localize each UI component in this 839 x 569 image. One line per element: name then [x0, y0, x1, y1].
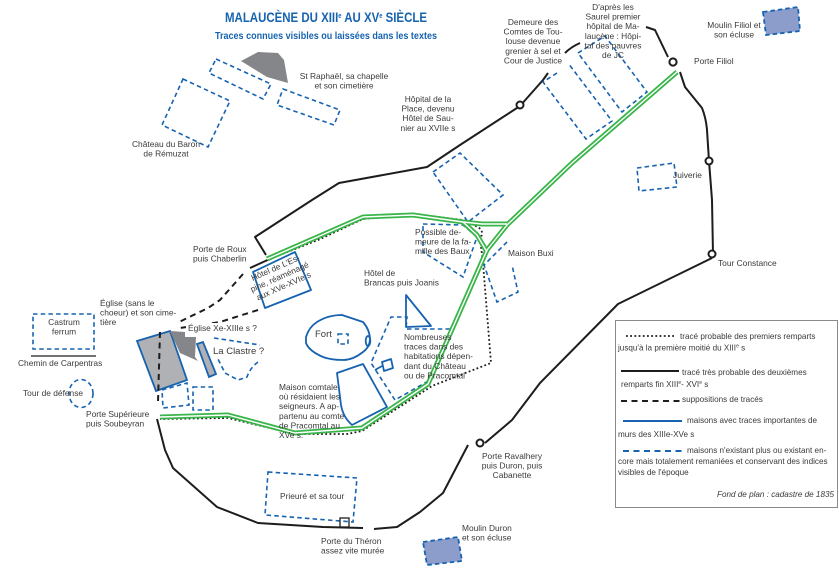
Castrum ferrum house: [33, 314, 94, 349]
labels on the map: ou de Pracomtal: [404, 370, 465, 380]
legend panel: [616, 320, 838, 508]
Juiverie house: [637, 163, 677, 191]
labels on the map: Place, devenu: [401, 104, 455, 114]
labels on the map: son écluse: [714, 30, 754, 40]
small square link: [375, 366, 382, 370]
labels on the map: où résidaient les: [279, 392, 340, 402]
legend: solid black text: s: [702, 380, 708, 389]
Moulin Filiol: [763, 7, 800, 35]
labels on the map: Porte du Théron: [321, 536, 381, 546]
La Clastre dashed: [214, 338, 260, 380]
legend: solid black text: remparts fin XIII: [621, 380, 678, 389]
title: e: [338, 13, 342, 20]
houses near church: [162, 383, 213, 410]
labels on the map: traces dans des: [404, 342, 463, 352]
St Raphaël houses: [209, 59, 340, 125]
label: St Raphaël: et son cimetière: [314, 81, 374, 91]
labels on the map: Hôpital de la: [405, 94, 451, 104]
label: Château du Baron: Château du Baron: [132, 139, 200, 149]
chapel: [197, 342, 216, 377]
Possible demeure house: [423, 224, 477, 277]
Fort: [306, 315, 370, 360]
legend: dashed blue text: maisons n'existant plus ou existant en-: [687, 446, 826, 455]
labels on the map: Hôtel de Sau-: [402, 113, 454, 123]
labels on the map: Hôtel de: [364, 268, 395, 278]
labels on the map: dant du Château: [404, 361, 466, 371]
Hôpital de la Place house: [433, 153, 503, 222]
labels on the map: louse devenue: [506, 36, 561, 46]
labels on the map: Brancas puis Joanis: [364, 278, 439, 288]
labels on the map: Saurel premier: [586, 12, 641, 22]
Prieuré tower: [340, 518, 349, 527]
legend: solid black text: tracé très probable des deuxièmes: [682, 368, 807, 377]
legend: solid black text: e: [678, 380, 681, 386]
label: St Raphaël: St Raphaël, sa chapelle: [300, 71, 388, 81]
labels on the map: Maison Buxi: [508, 248, 554, 258]
title: e: [379, 13, 383, 20]
Maison comtale: [337, 364, 387, 425]
legend: source note: Fond de plan : cadastre de 1835: [717, 490, 834, 499]
legend: dotted text: e: [736, 344, 739, 350]
title: SIÈCLE: [382, 9, 427, 25]
labels on the map: puis Chaberlin: [193, 254, 247, 264]
labels on the map: Église Xe-XIIIe s ?: [188, 323, 257, 333]
labels on the map: ferrum: [52, 327, 76, 337]
labels on the map: mille des Baux: [415, 246, 470, 256]
labels on the map: Cabanette: [493, 470, 532, 480]
labels on the map: Prieuré et sa tour: [280, 491, 344, 501]
legend: solid black text: - XVI: [681, 380, 699, 389]
Moulin Duron: [423, 537, 462, 565]
label: Hôtel de l'Espine: aux XVe-XVIe s: [255, 269, 312, 302]
labels on the map: nier au XVIIe s: [401, 123, 455, 133]
labels on the map: de Pracomtal au: [279, 420, 340, 430]
subtitle: Traces connues visibles ou laissées dans les textes: [215, 30, 437, 42]
supposed traces dashed: [177, 258, 272, 328]
legend: solid black: [621, 370, 679, 372]
labels on the map: tière: [100, 317, 117, 327]
title: AU XV: [341, 9, 380, 25]
vertical dashed over church: [158, 332, 160, 402]
labels on the map: grenier à sel et: [505, 46, 561, 56]
labels on the map: Porte Ravalhery: [482, 451, 542, 461]
white box behind Église label: [186, 323, 258, 334]
legend: solid black text: e: [699, 380, 702, 386]
labels on the map: puis Soubeyran: [86, 419, 145, 429]
church: [137, 331, 187, 391]
labels on the map: Moulin Filiol et: [707, 20, 761, 30]
legend: dotted: [626, 335, 676, 337]
labels on the map: Castrum: [48, 317, 80, 327]
legend: solid blue text: murs des XIIIe-XVe s: [618, 430, 694, 439]
ramparts: second walls: [157, 27, 713, 529]
label: Hôtel de l'Espine: Hôtel de L'Es-: [249, 252, 301, 283]
Fort dashed square: [338, 334, 348, 344]
labels on the map: assez vite murée: [321, 546, 385, 556]
labels on the map: et son écluse: [462, 533, 512, 543]
legend: solid blue: [623, 420, 682, 422]
Maison Buxi house: [484, 242, 518, 302]
St Raphaël chapel shape: [241, 52, 288, 83]
labels on the map: Juiverie: [673, 170, 702, 180]
labels on the map: tal des pauvres: [585, 40, 641, 50]
labels on the map: Possible de-: [415, 227, 461, 237]
legend: dotted text: jusqu'à la première moitié du XIII: [617, 344, 736, 352]
labels on the map: Porte Supérieure: [86, 409, 149, 419]
Hôpital des pauvres house: [578, 36, 647, 112]
labels on the map: Cour de Justice: [504, 55, 562, 65]
Hôtel de Brancas triangle: [406, 295, 431, 327]
label: Château du Baron: de Rémuzat: [143, 149, 189, 159]
Château du Baron house: [162, 79, 230, 147]
small square: [382, 359, 393, 371]
legend: dotted text: s: [739, 344, 745, 352]
labels on the map: choeur) et son cime-: [100, 308, 177, 318]
legend: dashed blue text: visibles de l'époque: [618, 468, 689, 477]
Prieuré house: [265, 472, 357, 522]
legend: dashed black: [621, 400, 680, 402]
Tour de défense dashed circle: [69, 380, 93, 408]
church choir shape: [170, 331, 198, 361]
labels on the map: Porte de Roux: [193, 244, 247, 254]
labels on the map: XVe s.: [279, 430, 303, 440]
labels on the map: Maison comtale: [279, 382, 338, 392]
labels on the map: Tour Constance: [718, 258, 777, 268]
labels on the map: Tour de défense: [23, 388, 83, 398]
label: Hôtel de l'Espine: pine, réaménagé: [249, 259, 311, 294]
probable first ramparts dotted: [160, 214, 491, 434]
Comtes de Toulouse house: [543, 63, 612, 139]
labels on the map: Église (sans le: [100, 298, 154, 308]
Hôtel de l'Espine house: [253, 252, 311, 308]
labels on the map: habitations dépen-: [404, 351, 473, 361]
labels on the map: Demeure des: [508, 17, 558, 27]
legend: dashed black text: suppositions de tracés: [682, 395, 763, 404]
gates: [476, 58, 716, 447]
labels on the map: Comtes de Tou-: [504, 27, 563, 37]
labels on the map: laucène : Hôpi-: [585, 31, 641, 41]
labels on the map: Nombreuses: [404, 332, 451, 342]
Château dependent dashed area: [371, 317, 450, 400]
labels on the map: seigneurs. A ap-: [279, 401, 339, 411]
green road: [160, 72, 677, 433]
labels on the map: puis Duron, puis: [482, 461, 542, 471]
labels on the map: meure de la fa-: [415, 237, 472, 247]
Fort tower: [366, 336, 370, 346]
labels on the map: La Clastre ?: [213, 346, 264, 357]
labels on the map: Moulin Duron: [462, 523, 512, 533]
labels on the map: Chemin de Carpentras: [18, 358, 102, 368]
labels on the map: hôpital de Ma-: [586, 21, 640, 31]
legend: dotted text: tracé probable des premiers remparts: [680, 332, 815, 341]
Fort label: Fort: [315, 329, 332, 340]
Chemin de Carpentras line: [31, 355, 96, 357]
legend: dashed blue: [623, 450, 682, 452]
legend: solid blue text: maisons avec traces importantes de: [687, 416, 817, 425]
labels on the map: D'après les: [592, 2, 634, 12]
label: Hôtel de l'Espine: [245, 250, 315, 303]
title: MALAUCÈNE DU XIII: [225, 9, 363, 25]
labels on the map: de JC: [602, 50, 624, 60]
legend: dashed blue text: core mais totalement remaniées et conservant des indices: [618, 457, 828, 466]
labels on the map: Porte Filiol: [694, 56, 734, 66]
labels on the map: partenu au comte: [279, 411, 345, 421]
